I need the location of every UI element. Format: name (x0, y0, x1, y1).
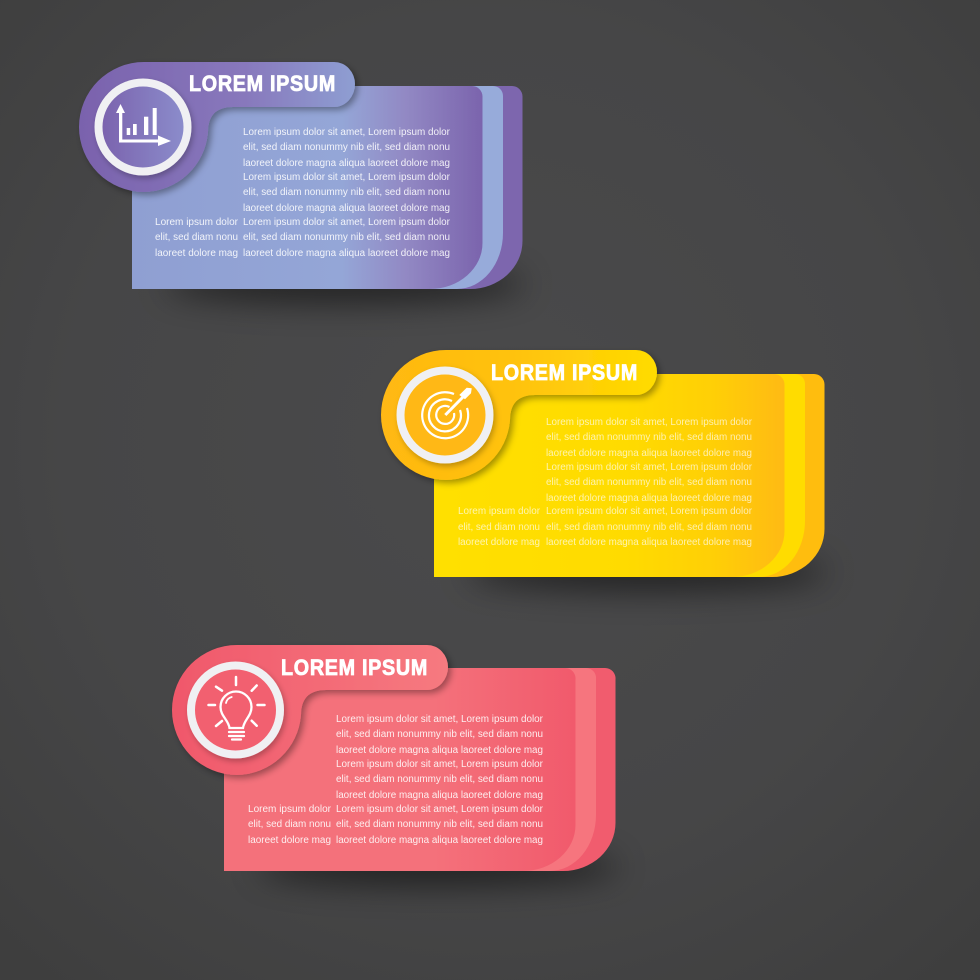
body text: laoreet dolore magna aliqua laoreet dolore mag (243, 203, 450, 214)
body text: elit, sed diam nonummy nib elit, sed diam nonu (336, 819, 543, 830)
body text: elit, sed diam nonummy nib elit, sed diam nonu (546, 432, 752, 443)
body text: Lorem ipsum dolor sit amet, Lorem ipsum dolor (336, 714, 544, 725)
body text: laoreet dolore magna aliqua laoreet dolore mag (336, 790, 543, 801)
body text: Lorem ipsum dolor sit amet, Lorem ipsum dolor (243, 172, 451, 183)
back page (602, 374, 824, 577)
back page (300, 86, 522, 289)
body text (155, 127, 451, 259)
heading: LOREM IPSUM (491, 360, 638, 385)
body text: laoreet dolore magna aliqua laoreet dolore mag (336, 835, 543, 846)
middle page (602, 374, 805, 577)
icon ring (98, 82, 188, 172)
icon: target with dart (422, 388, 472, 438)
body text: elit, sed diam nonu (155, 232, 238, 243)
card: purple (79, 62, 525, 302)
body text (458, 417, 753, 548)
body text: Lorem ipsum dolor sit amet, Lorem ipsum dolor (546, 462, 753, 473)
header tab with circle badge (79, 62, 355, 192)
body text: laoreet dolore mag (248, 835, 331, 846)
body text: Lorem ipsum dolor sit amet, Lorem ipsum dolor (243, 127, 451, 138)
body text: Lorem ipsum dolor (155, 217, 239, 228)
body text: laoreet dolore magna aliqua laoreet dolore mag (546, 537, 752, 548)
front panel (434, 374, 784, 577)
body text: Lorem ipsum dolor sit amet, Lorem ipsum dolor (336, 804, 544, 815)
body text: Lorem ipsum dolor sit amet, Lorem ipsum dolor (243, 217, 451, 228)
body text: Lorem ipsum dolor sit amet, Lorem ipsum dolor (336, 759, 544, 770)
header tab with circle badge (381, 350, 657, 480)
front panel (132, 86, 482, 289)
body text: elit, sed diam nonu (458, 522, 540, 533)
icon: light bulb (208, 677, 264, 740)
header tab with circle badge (172, 645, 448, 775)
body text: laoreet dolore magna aliqua laoreet dolore mag (243, 158, 450, 169)
cast shadow (165, 266, 525, 302)
body text: laoreet dolore magna aliqua laoreet dolore mag (336, 745, 543, 756)
body text: laoreet dolore magna aliqua laoreet dolore mag (546, 448, 752, 459)
back page (393, 668, 616, 871)
cast shadow (467, 554, 827, 590)
body text: Lorem ipsum dolor sit amet, Lorem ipsum dolor (546, 506, 753, 517)
icon ring (400, 370, 490, 460)
body text: elit, sed diam nonummy nib elit, sed diam nonu (243, 142, 450, 153)
card: red (172, 645, 618, 885)
middle page (393, 668, 596, 871)
body text: laoreet dolore mag (155, 248, 238, 259)
cast shadow (258, 849, 618, 885)
body text: laoreet dolore magna aliqua laoreet dolore mag (546, 493, 752, 504)
body text: elit, sed diam nonummy nib elit, sed diam nonu (336, 774, 543, 785)
body text: Lorem ipsum dolor sit amet, Lorem ipsum dolor (546, 417, 753, 428)
icon: bar chart with arrows (116, 104, 171, 146)
body text: laoreet dolore mag (458, 537, 540, 548)
card: yellow (381, 350, 827, 590)
body text: laoreet dolore magna aliqua laoreet dolore mag (243, 248, 450, 259)
body text: elit, sed diam nonummy nib elit, sed diam nonu (546, 522, 752, 533)
middle page (300, 86, 503, 289)
body text (248, 714, 544, 846)
body text: Lorem ipsum dolor (458, 506, 541, 517)
body text: elit, sed diam nonummy nib elit, sed diam nonu (243, 232, 450, 243)
body text: elit, sed diam nonummy nib elit, sed diam nonu (243, 187, 450, 198)
body text: Lorem ipsum dolor (248, 804, 332, 815)
heading: LOREM IPSUM (281, 655, 428, 680)
heading: LOREM IPSUM (189, 71, 336, 96)
body text: elit, sed diam nonu (248, 819, 331, 830)
front panel (224, 668, 576, 871)
body text: elit, sed diam nonummy nib elit, sed diam nonu (546, 477, 752, 488)
body text: elit, sed diam nonummy nib elit, sed diam nonu (336, 729, 543, 740)
icon ring (191, 666, 280, 754)
